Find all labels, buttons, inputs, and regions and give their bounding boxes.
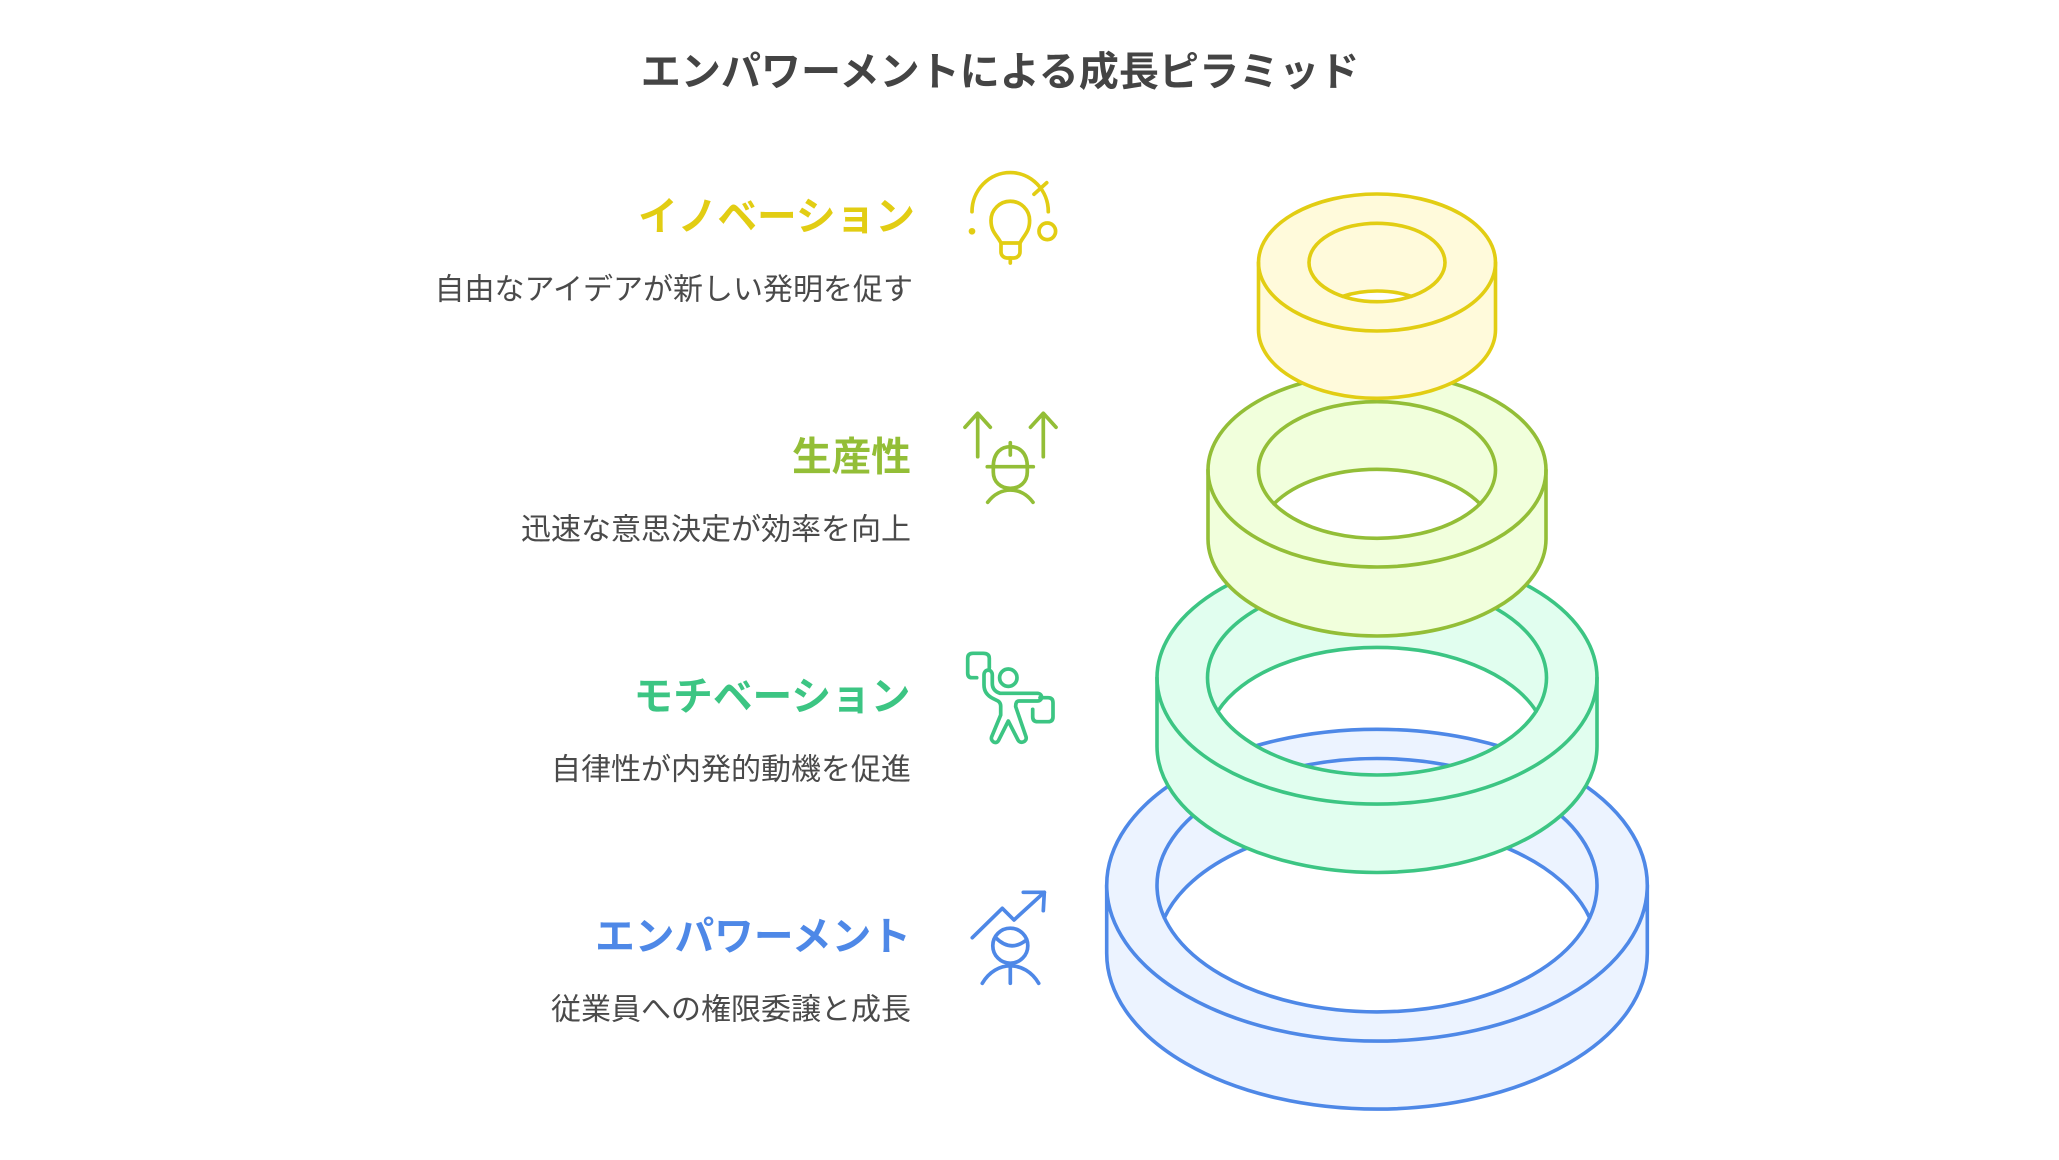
description: productivity: 迅速な意思決定が効率を向上 [521,513,911,546]
label: innovation: イノベーション [638,195,915,239]
ring: empowerment (blue base) [1107,729,1647,1109]
icon: person with flags [968,653,1053,742]
ring: motivation (teal) [1157,552,1597,873]
description: innovation: 自由なアイデアが新しい発明を促す [434,273,913,306]
label: productivity [521,436,911,546]
icon: lightbulb [970,173,1056,263]
icon: worker with arrows [965,413,1056,502]
label: productivity: 生産性 [792,436,911,480]
description: motivation: 自律性が内発的動機を促進 [551,753,911,786]
label: motivation: モチベーション [633,675,910,719]
description: empowerment: 従業員への権限委譲と成長 [551,993,911,1026]
ring: productivity (yellow-green) [1208,373,1546,636]
label: innovation [434,195,915,306]
ring: innovation (yellow top) [1258,194,1496,398]
icon: person with growth arrow [972,892,1044,983]
label: motivation [551,675,911,786]
label: empowerment: エンパワーメント [595,915,911,959]
title: エンパワーメントによる成長ピラミッド [641,50,1359,94]
label: empowerment [551,915,911,1026]
